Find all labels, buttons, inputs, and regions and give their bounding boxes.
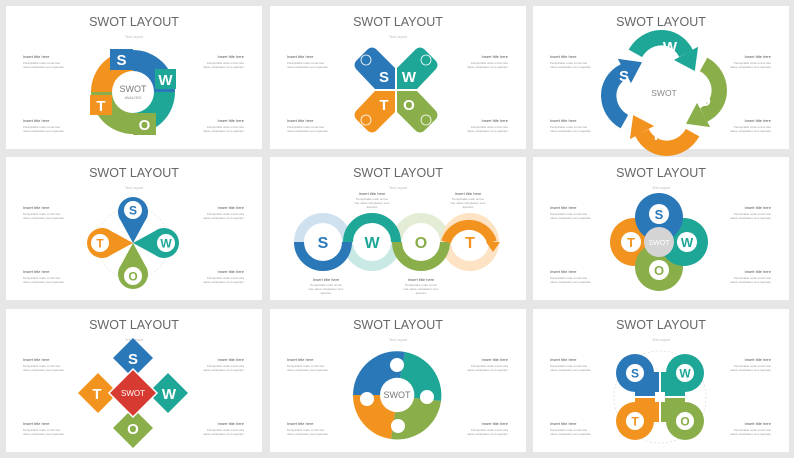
slide 8: segmented circle — [270, 309, 526, 452]
clover diagram — [614, 351, 706, 443]
circles diagram: W — [681, 235, 694, 250]
diamonds diagram — [78, 338, 188, 448]
text blocks: Perspiciatis unde omnis iste — [23, 364, 61, 368]
arrows diagram — [609, 38, 719, 148]
petals diagram: O — [403, 97, 415, 114]
text blocks: Insert title here — [745, 421, 772, 426]
chain diagram: T — [465, 235, 475, 252]
slide 7: diamonds: Text Layout — [125, 338, 143, 342]
text blocks: natus voluptatem sem aperiam — [23, 280, 65, 284]
text blocks: natus voluptatem sem aperiam — [23, 129, 65, 133]
ring diagram: W — [158, 72, 173, 89]
text blocks: Insert title here — [23, 269, 50, 274]
slide 2: arrow petals — [270, 6, 526, 149]
text blocks: Insert title here — [23, 205, 50, 210]
text blocks: natus voluptatem sem aperiam — [467, 65, 508, 69]
slide 5: chain — [270, 157, 526, 300]
chain diagram: W — [364, 235, 380, 252]
text blocks: natus voluptatem sem aperiam — [203, 129, 244, 133]
text blocks: Insert title here — [550, 357, 577, 362]
slide 6: overlapping circles: Text Layout — [652, 186, 670, 190]
segmented circle diagram: SWOT — [384, 390, 411, 400]
slide 2: arrow petals: Text Layout — [389, 35, 407, 39]
text blocks: Insert title here — [23, 357, 50, 362]
slide 1: ring SWOT analysis — [6, 6, 262, 149]
text blocks: Insert title here — [550, 269, 577, 274]
chain diagram: S — [318, 235, 329, 252]
text blocks: Insert title here — [287, 118, 314, 123]
arrows diagram: SWOT — [651, 88, 677, 98]
title: SWOT LAYOUT — [89, 318, 179, 332]
ring diagram: S — [116, 52, 127, 69]
text blocks: natus voluptatem sem aperiam — [203, 432, 244, 436]
diamonds diagram: T — [92, 386, 102, 403]
arrows diagram: O — [699, 93, 711, 110]
title: SWOT LAYOUT — [616, 15, 706, 29]
text blocks — [23, 54, 245, 133]
title: SWOT LAYOUT — [89, 166, 179, 180]
text blocks: Insert title here — [218, 54, 245, 59]
diamonds diagram: SWOT — [121, 389, 145, 398]
text blocks: aperiam — [367, 205, 378, 209]
slide 1: ring SWOT analysis: Text Layout — [125, 35, 143, 39]
text blocks: Perspiciatis unde omnis iste — [734, 276, 771, 280]
text blocks: natus voluptatem sem aperiam — [550, 432, 592, 436]
text blocks: Perspiciatis unde omnis — [452, 197, 484, 201]
text blocks: natus voluptatem sem aperiam — [467, 129, 508, 133]
slide 9: clover — [533, 309, 789, 452]
text blocks: Perspiciatis unde omnis iste — [23, 276, 61, 280]
text blocks: natus voluptatem sem aperiam — [467, 368, 508, 372]
text blocks: Insert title here — [482, 357, 509, 362]
text blocks: Insert title here — [550, 205, 577, 210]
title: SWOT LAYOUT — [89, 15, 179, 29]
text blocks: natus voluptatem sem aperiam — [550, 216, 592, 220]
pins diagram: T — [96, 236, 104, 250]
text blocks: Insert title here — [23, 118, 50, 123]
text blocks: Insert title here — [287, 421, 314, 426]
pins diagram: S — [129, 204, 137, 218]
text blocks: natus voluptatem sem aperiam — [203, 368, 244, 372]
text blocks: Perspiciatis unde omnis iste — [550, 212, 588, 216]
text blocks: natus voluptatem sem aperiam — [287, 65, 329, 69]
title: SWOT LAYOUT — [616, 166, 706, 180]
ring diagram — [90, 49, 176, 135]
pins diagram — [87, 197, 179, 289]
title: SWOT LAYOUT — [353, 318, 443, 332]
circles diagram: O — [654, 263, 664, 278]
circles diagram: S — [655, 207, 664, 222]
text blocks: Perspiciatis unde omnis iste — [287, 125, 325, 129]
text blocks: Perspiciatis unde omnis iste — [734, 212, 771, 216]
text blocks — [550, 54, 772, 133]
text blocks: Perspiciatis unde omnis iste — [207, 125, 244, 129]
text blocks: Perspiciatis unde omnis iste — [207, 212, 244, 216]
text blocks — [23, 357, 245, 436]
chain diagram: O — [415, 235, 427, 252]
text blocks: natus voluptatem sem aperiam — [730, 280, 771, 284]
text blocks: natus voluptatem sem aperiam — [203, 280, 244, 284]
text blocks: natus voluptatem sem aperiam — [467, 432, 508, 436]
text blocks — [550, 357, 772, 436]
text blocks: Perspiciatis unde omnis iste — [287, 364, 325, 368]
text blocks: Perspiciatis unde omnis iste — [471, 125, 508, 129]
arrows diagram: S — [619, 68, 629, 85]
ring diagram: ANALYSIS — [125, 96, 142, 100]
text blocks: aperiam — [321, 291, 332, 295]
circles diagram — [610, 193, 708, 291]
slide 5: chain: Text Layout — [389, 186, 407, 190]
text blocks: iste natus voluptatem sem — [355, 201, 390, 205]
text blocks: Perspiciatis unde omnis iste — [734, 125, 771, 129]
text blocks: natus voluptatem sem aperiam — [287, 129, 329, 133]
slide 4: pins — [6, 157, 262, 300]
text blocks: Insert title here — [482, 54, 509, 59]
circles diagram: SWOT — [648, 240, 670, 247]
text blocks: natus voluptatem sem aperiam — [730, 129, 771, 133]
chain diagram — [299, 218, 500, 266]
text blocks: natus voluptatem sem aperiam — [550, 129, 592, 133]
petals diagram: T — [379, 97, 389, 114]
circles diagram: T — [627, 235, 635, 250]
text blocks: Perspiciatis unde omnis iste — [550, 276, 588, 280]
title: SWOT LAYOUT — [616, 318, 706, 332]
text blocks — [550, 205, 772, 284]
title: SWOT LAYOUT — [353, 166, 443, 180]
text blocks: Perspiciatis unde omnis iste — [550, 125, 588, 129]
text blocks: natus voluptatem sem aperiam — [730, 216, 771, 220]
text blocks: aperiam — [416, 291, 427, 295]
ring diagram: T — [96, 98, 106, 115]
pins diagram: W — [160, 236, 172, 250]
text blocks: Perspiciatis unde omnis iste — [287, 61, 325, 65]
slide 3: circular arrows: Text Layout — [652, 35, 670, 39]
title: SWOT LAYOUT — [353, 15, 443, 29]
text blocks: Perspiciatis unde omnis iste — [287, 428, 325, 432]
text blocks: Perspiciatis unde omnis iste — [23, 125, 61, 129]
text blocks: natus voluptatem sem aperiam — [550, 368, 592, 372]
text blocks: natus voluptatem sem aperiam — [23, 216, 65, 220]
text blocks: Perspiciatis unde omnis iste — [734, 61, 771, 65]
text blocks: Insert title here — [482, 118, 509, 123]
clover diagram: W — [679, 366, 691, 380]
text blocks: Perspiciatis unde omnis iste — [207, 276, 244, 280]
text blocks: aperiam — [463, 205, 474, 209]
slide 6: overlapping circles — [533, 157, 789, 300]
slide 8: segmented circle: Text Layout — [389, 338, 407, 342]
petals diagram: S — [379, 69, 389, 86]
petals diagram: W — [402, 69, 417, 86]
text blocks: natus voluptatem sem aperiam — [23, 368, 65, 372]
text blocks: Insert title here — [287, 54, 314, 59]
clover diagram: O — [680, 414, 690, 428]
diamonds diagram: S — [128, 351, 138, 368]
text blocks: Insert title here — [23, 421, 50, 426]
text blocks: Insert title here — [482, 421, 509, 426]
text blocks: Insert title here — [23, 54, 50, 59]
text blocks: Perspiciatis unde omnis iste — [734, 364, 771, 368]
text blocks: Insert title here — [745, 357, 772, 362]
text blocks: Insert title here — [745, 118, 772, 123]
text blocks — [309, 191, 486, 295]
text blocks: Perspiciatis unde omnis iste — [550, 364, 588, 368]
text blocks: Insert title here — [745, 54, 772, 59]
text blocks: Insert title here — [218, 118, 245, 123]
text blocks: iste natus voluptatem sem — [451, 201, 486, 205]
text blocks: Insert title here — [550, 54, 577, 59]
text blocks: Insert title here — [218, 421, 245, 426]
text blocks: Insert title here — [313, 277, 340, 282]
text blocks: natus voluptatem sem aperiam — [550, 65, 592, 69]
text blocks: Insert title here — [218, 205, 245, 210]
slide 7: diamonds — [6, 309, 262, 452]
text blocks: Insert title here — [218, 357, 245, 362]
text blocks: Perspiciatis unde omnis iste — [207, 364, 244, 368]
ring diagram: SWOT — [120, 84, 147, 94]
text blocks: Insert title here — [550, 118, 577, 123]
diamonds diagram: O — [127, 421, 139, 438]
text blocks: Insert title here — [359, 191, 386, 196]
text blocks: natus voluptatem sem aperiam — [730, 65, 771, 69]
text blocks: natus voluptatem sem aperiam — [730, 368, 771, 372]
text blocks: Perspiciatis unde omnis iste — [23, 61, 61, 65]
text blocks: Insert title here — [745, 269, 772, 274]
arrows diagram: W — [663, 39, 678, 56]
text blocks: Perspiciatis unde omnis iste — [207, 428, 244, 432]
text blocks — [287, 357, 509, 436]
slide 4: pins: Text Layout — [125, 186, 143, 190]
text blocks: natus voluptatem sem aperiam — [287, 432, 329, 436]
text blocks: Insert title here — [408, 277, 435, 282]
text blocks: Perspiciatis unde omnis — [405, 283, 437, 287]
text blocks: Insert title here — [550, 421, 577, 426]
diamonds diagram: W — [162, 386, 177, 403]
text blocks: iste natus voluptatem sem — [309, 287, 344, 291]
text blocks: natus voluptatem sem aperiam — [730, 432, 771, 436]
text blocks — [287, 54, 509, 133]
text blocks: Insert title here — [218, 269, 245, 274]
text blocks: natus voluptatem sem aperiam — [550, 280, 592, 284]
text blocks: Insert title here — [745, 205, 772, 210]
petals diagram — [354, 48, 438, 132]
text blocks: Perspiciatis unde omnis iste — [734, 428, 771, 432]
text blocks: Perspiciatis unde omnis iste — [471, 61, 508, 65]
text blocks: natus voluptatem sem aperiam — [23, 432, 65, 436]
text blocks: natus voluptatem sem aperiam — [287, 368, 329, 372]
text blocks: Perspiciatis unde omnis — [310, 283, 342, 287]
text blocks: Perspiciatis unde omnis iste — [23, 428, 61, 432]
text blocks: natus voluptatem sem aperiam — [203, 216, 244, 220]
text blocks: Perspiciatis unde omnis iste — [207, 61, 244, 65]
text blocks: iste natus voluptatem sem — [404, 287, 439, 291]
text blocks: natus voluptatem sem aperiam — [203, 65, 244, 69]
segmented circle diagram — [353, 351, 441, 439]
clover diagram: S — [631, 366, 639, 380]
slide 9: clover: Text Layout — [652, 338, 670, 342]
text blocks: Perspiciatis unde omnis iste — [23, 212, 61, 216]
text blocks: Perspiciatis unde omnis iste — [471, 364, 508, 368]
text blocks — [23, 205, 245, 284]
slide 3: circular arrows — [533, 6, 789, 149]
text blocks: Perspiciatis unde omnis — [356, 197, 388, 201]
text blocks: Perspiciatis unde omnis iste — [550, 428, 588, 432]
text blocks: Insert title here — [287, 357, 314, 362]
text blocks: Insert title here — [455, 191, 482, 196]
ring diagram: O — [139, 117, 151, 134]
clover diagram: T — [631, 414, 639, 428]
arrows diagram: T — [651, 127, 661, 144]
text blocks: Perspiciatis unde omnis iste — [550, 61, 588, 65]
text blocks: natus voluptatem sem aperiam — [23, 65, 65, 69]
pins diagram: O — [128, 270, 138, 284]
text blocks: Perspiciatis unde omnis iste — [471, 428, 508, 432]
